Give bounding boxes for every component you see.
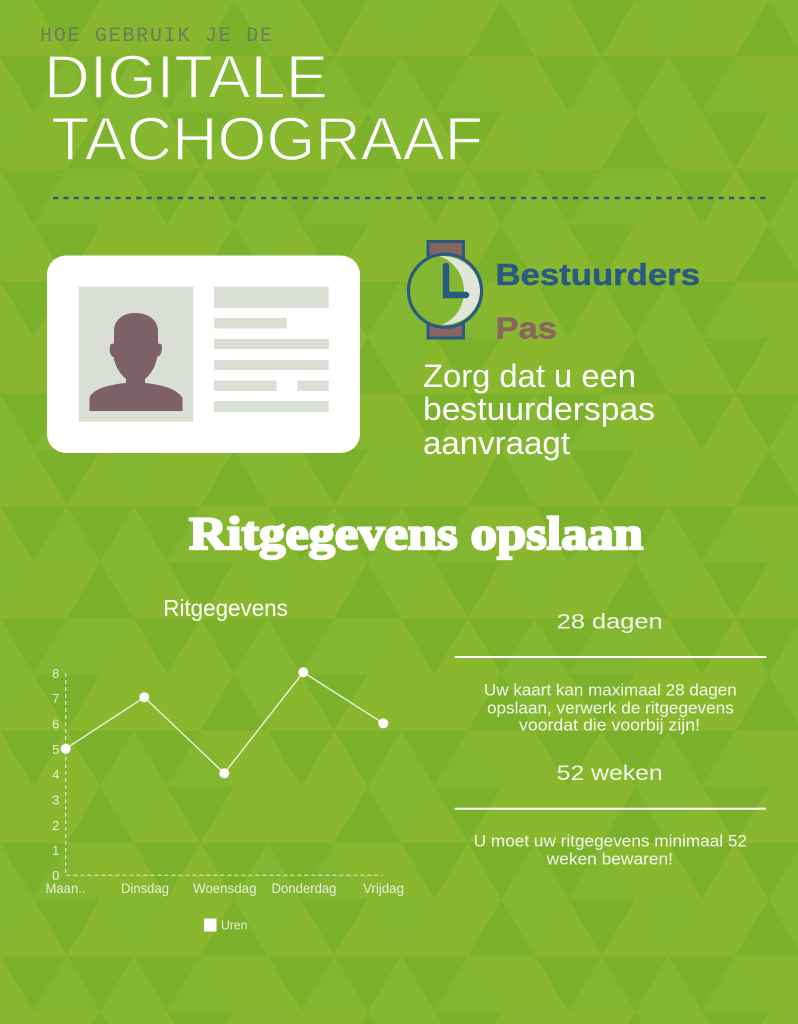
icon: driver card — [47, 256, 360, 453]
y axis labels: 7 — [52, 691, 59, 706]
section heading: ritgegevens opslaan: Ritgegevens opslaan — [189, 508, 643, 560]
text block: bestuurderspas aanvragen: bestuurderspas — [423, 391, 655, 427]
stat description — [474, 832, 747, 868]
rule — [455, 808, 766, 810]
card body — [47, 256, 360, 453]
chart legend — [204, 918, 248, 932]
y axis labels: 1 — [52, 843, 59, 858]
panel: 52 weken — [455, 762, 766, 868]
heading: pas: Pas — [496, 310, 557, 345]
title block — [40, 25, 483, 173]
watch strap bottom — [428, 318, 464, 338]
icon: person silhouette — [90, 313, 182, 411]
rule — [455, 656, 766, 658]
stat description: U moet uw ritgegevens minimaal 52 — [474, 832, 747, 851]
stat description: Uw kaart kan maximaal 28 dagen — [484, 681, 737, 700]
kicker: hoe gebruik je de: HOE GEBRUIK JE DE — [40, 25, 272, 48]
card data lines — [214, 287, 329, 412]
stat description — [484, 681, 737, 735]
card photo panel — [79, 287, 193, 422]
title line: digitale: DIGITALE — [44, 43, 328, 111]
watch strap top — [428, 242, 464, 264]
y axis labels: 3 — [52, 792, 59, 808]
chart legend: Uren — [221, 918, 248, 932]
stat heading: 52 weken: 52 weken — [557, 762, 663, 785]
stat heading: 28 dagen: 28 dagen — [557, 610, 663, 633]
y axis labels: 6 — [52, 716, 59, 732]
chart title: Ritgegevens — [163, 595, 288, 621]
text block: bestuurderspas aanvragen: aanvraagt — [423, 425, 570, 461]
y axis labels: 8 — [52, 666, 59, 681]
y axis labels: 5 — [52, 742, 59, 757]
data line — [66, 672, 383, 773]
icon: wristwatch — [408, 242, 482, 338]
watch hands — [446, 266, 466, 295]
x axis labels — [46, 881, 404, 896]
y axis labels: 2 — [52, 818, 59, 833]
data points — [61, 667, 388, 778]
watch face — [408, 254, 482, 327]
panel: 28 dagen — [455, 610, 766, 735]
y axis labels — [52, 666, 59, 883]
text block: bestuurderspas aanvragen — [423, 358, 655, 461]
stat description: voordat die voorbij zijn! — [519, 716, 700, 735]
x axis labels: Vrijdag — [363, 881, 404, 896]
x axis labels: Woensdag — [193, 881, 256, 896]
line chart: ritgegevens — [46, 595, 404, 932]
text block: bestuurderspas aanvragen: Zorg dat u een — [423, 358, 636, 394]
heading: bestuurders: Bestuurders — [496, 257, 700, 292]
watch crescent highlight — [440, 256, 480, 325]
y axis labels: 0 — [52, 868, 59, 883]
x axis labels: Dinsdag — [121, 881, 169, 896]
stat description: weken bewaren! — [546, 849, 673, 868]
dashed divider — [53, 197, 766, 199]
chart axes — [66, 673, 383, 875]
x axis labels: Donderdag — [272, 881, 336, 896]
stat description: opslaan, verwerk de ritgegevens — [487, 698, 734, 717]
title line: tachograaf: TACHOGRAAF — [51, 105, 483, 173]
x axis labels: Maan.. — [46, 881, 86, 896]
y axis labels: 4 — [52, 767, 59, 782]
